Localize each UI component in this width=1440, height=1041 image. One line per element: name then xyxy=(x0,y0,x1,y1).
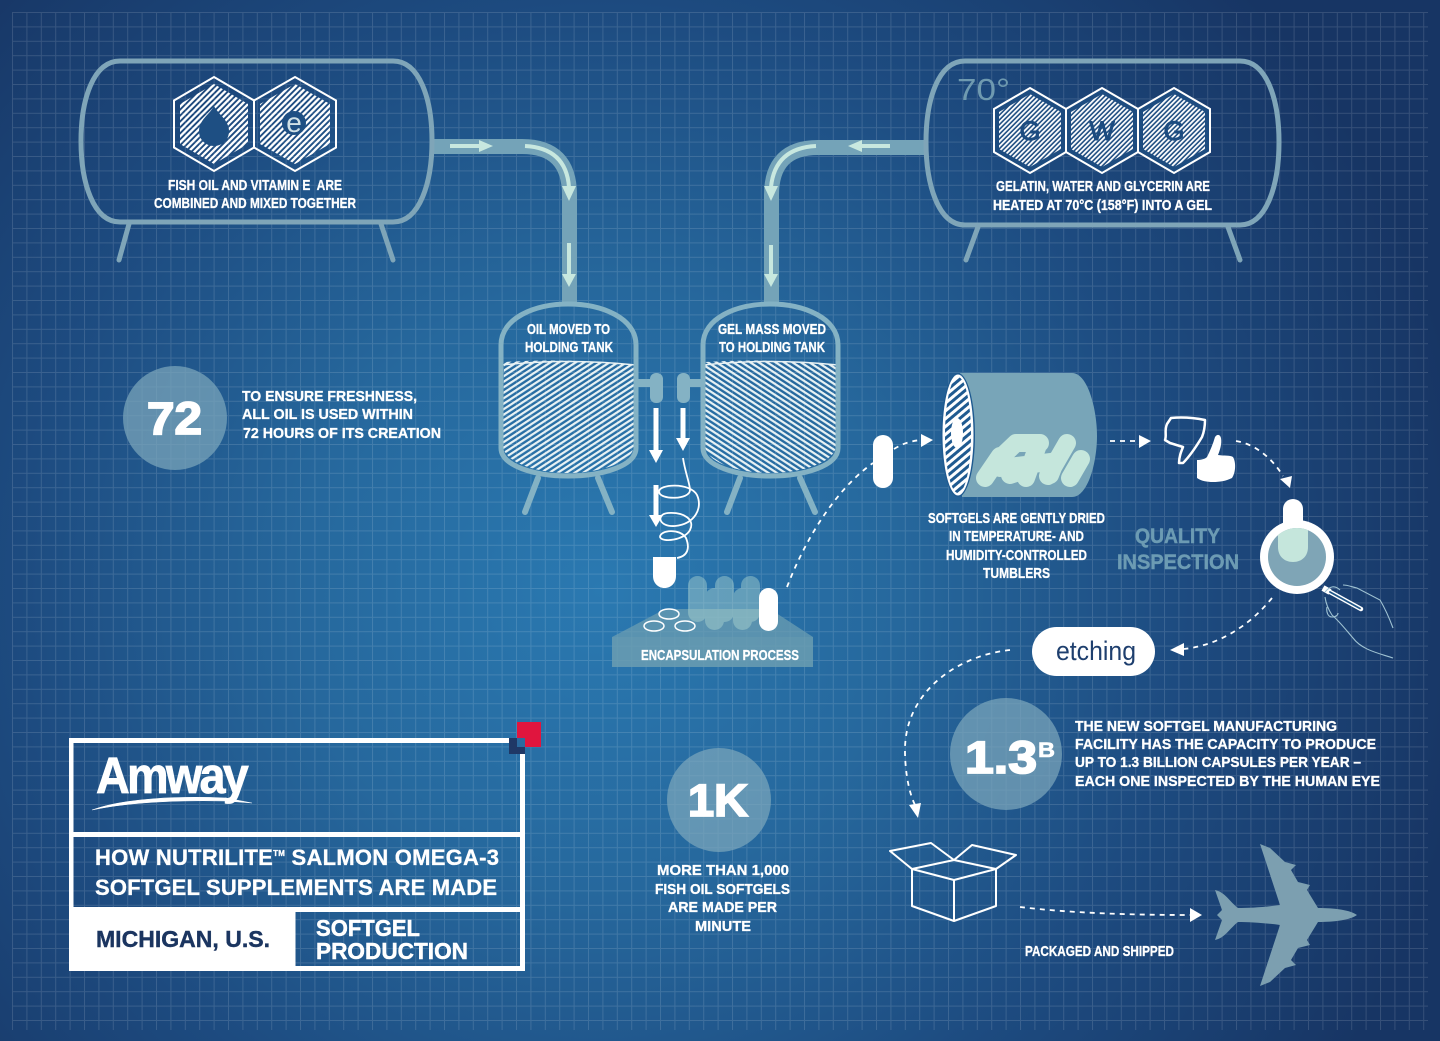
text: fish oil step xyxy=(154,178,356,212)
arrow: tumbler to inspection xyxy=(1110,435,1151,448)
text: 72 hours description: 72 HOURS OF ITS CREATION xyxy=(243,426,441,442)
icon: tumbler xyxy=(941,373,1097,497)
text: fish oil step: FISH OIL AND VITAMIN E ARE xyxy=(168,178,342,194)
hand outline xyxy=(1325,585,1393,658)
panel: encapsulation process xyxy=(612,576,813,667)
icon: gelatin hexagon xyxy=(994,88,1066,173)
icon: vitamin E hexagon: e xyxy=(286,107,302,138)
text: 72 hours description: TO ENSURE FRESHNESS, xyxy=(242,389,417,405)
text: 1K description: MINUTE xyxy=(695,919,751,935)
text: gel mass moved xyxy=(718,322,826,356)
arrow: gel from valve xyxy=(676,408,690,451)
text: 72 hours description: ALL OIL IS USED WITHIN xyxy=(242,407,413,423)
arrow: thumbs to magnifier xyxy=(1236,441,1292,488)
text: dried in tumblers xyxy=(928,511,1105,582)
icon: airplane xyxy=(1215,844,1357,986)
text: 1K description: ARE MADE PER xyxy=(668,900,778,916)
title text xyxy=(95,845,499,900)
text: gel mass moved: TO HOLDING TANK xyxy=(719,340,825,356)
text: 70 degrees: 70° xyxy=(957,72,1010,107)
arrow: right along pipe xyxy=(450,140,493,152)
arrow: down right pipe xyxy=(764,245,778,287)
stat: 1K softgels per minute: 1K xyxy=(688,775,749,826)
icon: glycerin hexagon xyxy=(1138,88,1210,173)
icon: thumbs up xyxy=(1197,435,1235,482)
location: MICHIGAN, U.S. xyxy=(96,926,270,952)
arrow: magnifier to etching xyxy=(1170,598,1272,656)
text: dried in tumblers: TUMBLERS xyxy=(983,566,1050,582)
text: 1.3B description: THE NEW SOFTGEL MANUFACTURING xyxy=(1075,719,1337,735)
arrow: encapsulation to softgel xyxy=(787,463,873,587)
text: oil moved: OIL MOVED TO xyxy=(527,322,610,338)
arrow: left along pipe xyxy=(848,140,890,152)
text: quality inspection xyxy=(1117,525,1239,574)
text: gelatin step: HEATED AT 70°C (158°F) INTO A GEL xyxy=(993,198,1212,214)
icon: magnifying glass and hand xyxy=(1260,499,1393,658)
text: dried in tumblers: IN TEMPERATURE- AND xyxy=(949,529,1084,545)
text: 1K description: MORE THAN 1,000 xyxy=(657,863,789,879)
text: 1.3B description xyxy=(1075,719,1380,790)
icon: open box xyxy=(890,843,1016,921)
text: dried in tumblers: HUMIDITY-CONTROLLED xyxy=(946,548,1087,564)
text: 1.3B description: EACH ONE INSPECTED BY THE HUMAN EYE xyxy=(1075,774,1380,790)
capsule dies xyxy=(644,609,695,631)
icon: vitamin E hexagon xyxy=(254,77,336,171)
white softgel xyxy=(759,588,778,631)
text: packaged and shipped: PACKAGED AND SHIPPED xyxy=(1025,944,1174,960)
stat: 1.3 billion capsules: B xyxy=(1038,739,1055,762)
arrow: oil into capsule xyxy=(649,485,663,527)
icon: forming capsule xyxy=(653,557,676,588)
icon: water hexagon xyxy=(1066,88,1138,173)
text: gelatin step xyxy=(993,179,1212,214)
text: gelatin step: GELATIN, WATER AND GLYCERIN ARE xyxy=(996,179,1210,195)
text: 1K description: FISH OIL SOFTGELS xyxy=(655,882,790,898)
softgels forming xyxy=(688,576,760,630)
title text: TM xyxy=(273,849,285,858)
text: oil moved: HOLDING TANK xyxy=(525,340,613,356)
corner squares xyxy=(509,722,541,754)
pipe: right tank to gel holding tank xyxy=(764,140,926,305)
tumbled softgels xyxy=(985,443,1081,478)
category xyxy=(316,915,468,964)
title text: SOFTGEL SUPPLEMENTS ARE MADE xyxy=(95,875,497,900)
etching pill: etching xyxy=(1056,636,1136,666)
text: quality inspection: INSPECTION xyxy=(1117,551,1239,574)
stat: 1.3 billion capsules xyxy=(950,698,1380,810)
panel: gelatin water glycerin tank xyxy=(926,61,1279,260)
text: fish oil step: COMBINED AND MIXED TOGETHER xyxy=(154,196,356,212)
text: 1K description xyxy=(655,863,790,935)
logo: Amway: Amway xyxy=(96,747,249,804)
text: dried in tumblers: SOFTGELS ARE GENTLY DRIED xyxy=(928,511,1105,527)
text: encapsulation: ENCAPSULATION PROCESS xyxy=(641,648,799,664)
panel: gel holding tank xyxy=(703,304,838,512)
valves xyxy=(638,373,702,403)
panel: oil holding tank xyxy=(501,304,636,512)
text: 1.3B description: FACILITY HAS THE CAPACITY TO PRODUCE xyxy=(1075,737,1376,753)
panel: title block xyxy=(69,722,541,971)
arrow: oil from valve xyxy=(649,408,663,463)
arrow: around bend xyxy=(525,146,576,201)
text: gel mass moved: GEL MASS MOVED xyxy=(718,322,826,338)
outer frame xyxy=(69,738,525,971)
arrow: down pipe xyxy=(562,243,576,287)
arrow: around right bend xyxy=(764,146,816,201)
text: quality inspection: QUALITY xyxy=(1135,525,1220,548)
text: oil moved xyxy=(525,322,613,356)
panel: fish oil and vitamin E tank xyxy=(81,61,432,260)
text: 72 hours description xyxy=(242,389,441,442)
stat: 1K softgels per minute xyxy=(655,748,790,935)
arrow: box to plane xyxy=(1020,907,1202,922)
icon: gelatin hexagon: G xyxy=(1019,116,1041,146)
pipe: left tank to oil holding tank xyxy=(432,140,576,305)
title text: HOW NUTRILITE xyxy=(95,845,273,870)
icon: thumbs down xyxy=(1165,418,1205,463)
icon: water hexagon: W xyxy=(1089,116,1115,146)
text: 1.3B description: UP TO 1.3 BILLION CAPSULES PER YEAR – xyxy=(1075,755,1361,771)
stat: 72 hours: 72 xyxy=(147,393,202,444)
arrow: softgel to tumbler xyxy=(894,434,933,449)
gel ribbon spiral xyxy=(659,458,699,558)
icon: softgel xyxy=(873,435,893,488)
stat: 1.3 billion capsules: 1.3 xyxy=(965,732,1037,783)
icon: fish oil hexagon xyxy=(174,77,254,171)
icon: glycerin hexagon: G xyxy=(1163,116,1185,146)
arrow: etching to box xyxy=(905,650,1010,818)
category: PRODUCTION xyxy=(316,938,468,964)
etching pill xyxy=(1032,627,1155,676)
title text: SALMON OMEGA-3 xyxy=(285,845,499,870)
category: SOFTGEL xyxy=(316,915,420,941)
stat: 72 hours xyxy=(123,366,441,470)
